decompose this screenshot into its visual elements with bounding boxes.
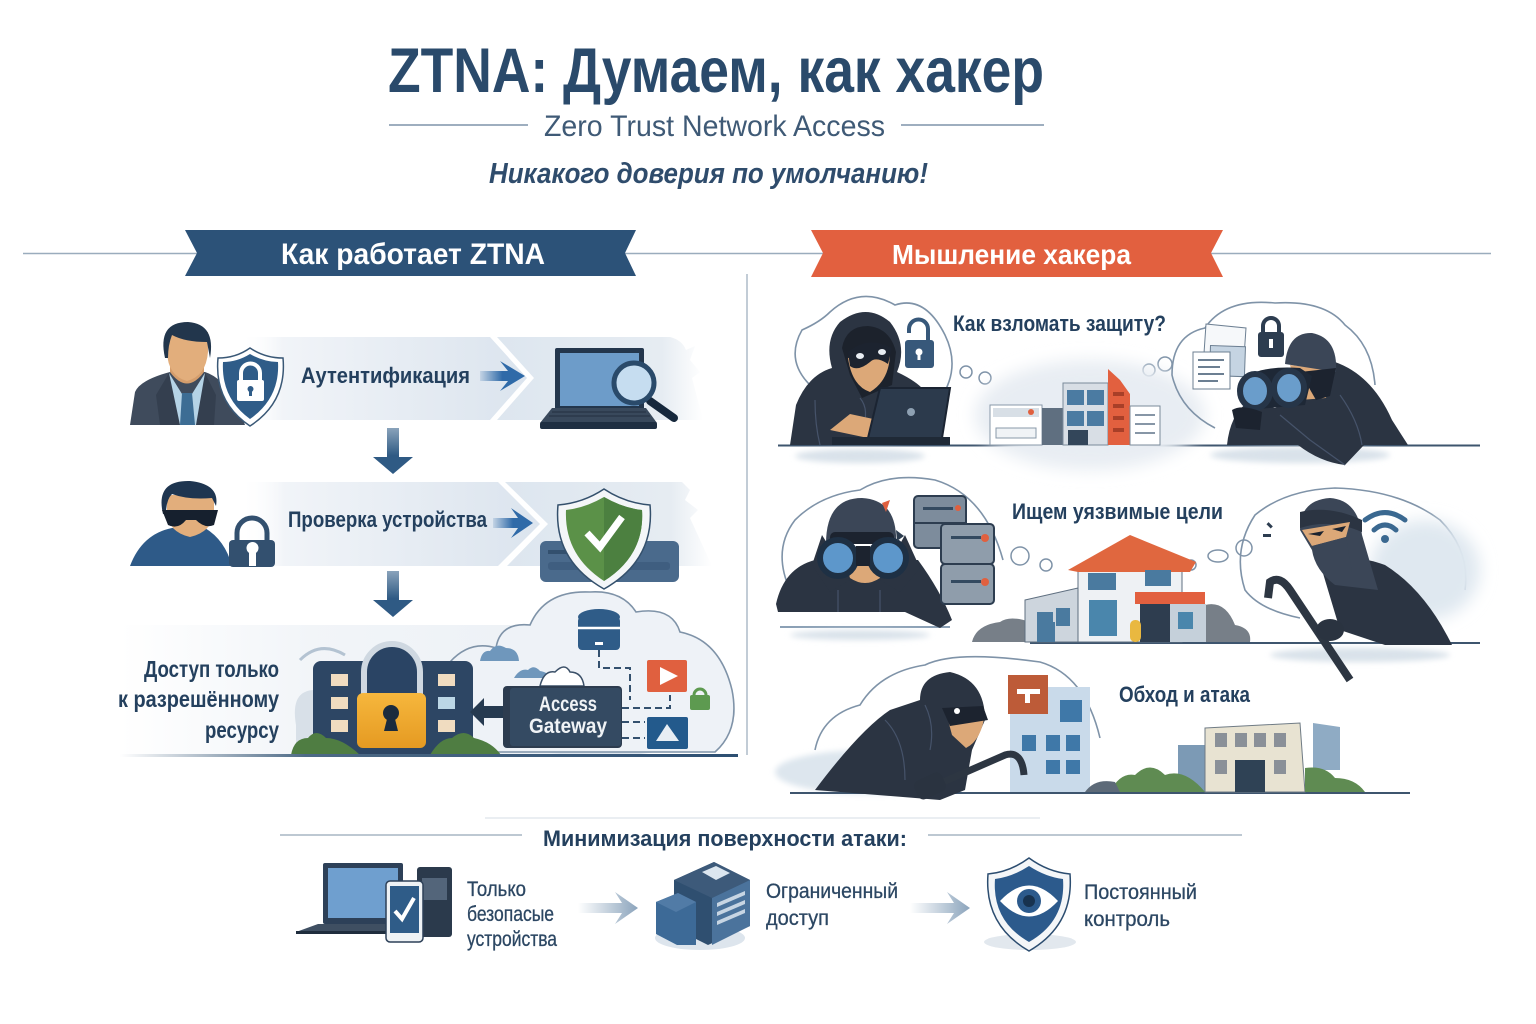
hacker crouching bbox=[815, 672, 1024, 801]
icon: user bbox=[130, 322, 245, 425]
label: Проверка устройства bbox=[288, 507, 488, 532]
icon: locked server bbox=[291, 644, 501, 755]
building with red roof bbox=[972, 535, 1250, 642]
arrow down bbox=[373, 571, 413, 617]
icon: access gateway: Gateway bbox=[529, 715, 607, 738]
banner: how ZTNA works bbox=[185, 230, 636, 276]
icon: user with glasses bbox=[130, 481, 232, 566]
text: Постоянный bbox=[1084, 881, 1197, 904]
icon: padlock bbox=[905, 320, 934, 368]
ground bbox=[775, 750, 1410, 794]
icon: server with shield bbox=[540, 489, 679, 589]
icon: access gateway: Access bbox=[539, 693, 597, 716]
panel: attack surface minimisation bbox=[280, 818, 1242, 951]
buildings bbox=[975, 360, 1205, 470]
cloud with resources bbox=[450, 592, 734, 752]
thought bubbles bbox=[1011, 540, 1252, 571]
arrow bbox=[480, 361, 525, 391]
arrow bbox=[470, 698, 503, 726]
icon: blue tile bbox=[647, 717, 688, 749]
text: Только bbox=[467, 878, 526, 901]
text: устройства bbox=[467, 928, 557, 951]
heading: Минимизация поверхности атаки: bbox=[543, 826, 907, 851]
icon: red tile bbox=[1008, 675, 1048, 714]
step 2: device check bbox=[130, 481, 712, 589]
label bbox=[118, 656, 279, 743]
ground bbox=[780, 626, 1480, 662]
icon: access gateway bbox=[503, 667, 622, 748]
subtitle: Zero Trust Network Access bbox=[544, 110, 885, 143]
hacker with crowbar bbox=[1240, 488, 1480, 680]
blue building bbox=[815, 657, 1100, 792]
thought bubbles bbox=[960, 357, 1172, 384]
label: Аутентификация bbox=[301, 363, 470, 388]
text: контроль bbox=[1084, 908, 1170, 931]
scene 3: bypass and attack bbox=[775, 657, 1410, 801]
label: Ищем уязвимые цели bbox=[1012, 499, 1223, 524]
arrow bbox=[578, 892, 638, 924]
icon: shield with lock bbox=[218, 348, 283, 426]
icon: servers bbox=[882, 496, 994, 604]
ground bbox=[778, 444, 1480, 463]
panel: how ZTNA works bbox=[118, 322, 738, 757]
arrow bbox=[910, 892, 970, 924]
text: Ограниченный bbox=[766, 880, 898, 903]
text: доступ bbox=[766, 907, 829, 930]
arrow bbox=[493, 508, 533, 538]
icon: video tile bbox=[647, 660, 687, 692]
icons: small clouds bbox=[480, 646, 550, 678]
label: к разрешённому bbox=[118, 686, 279, 712]
text bbox=[766, 880, 898, 930]
icon: green lock bbox=[690, 689, 710, 710]
tagline: Никакого доверия по умолчанию! bbox=[489, 158, 928, 190]
icon: documents bbox=[1193, 324, 1246, 389]
title: ZTNA: Думаем, как хакер bbox=[388, 36, 1044, 106]
icon: devices bbox=[296, 863, 452, 942]
hacker with binoculars bbox=[776, 478, 1003, 628]
hacker with laptop bbox=[790, 296, 952, 445]
text bbox=[467, 878, 557, 951]
icon: database bbox=[578, 609, 620, 650]
icon: shield with eye bbox=[984, 858, 1076, 951]
connectors bbox=[599, 650, 670, 738]
label: Как взломать защиту? bbox=[953, 311, 1166, 336]
step 1: authentication bbox=[130, 322, 703, 429]
label: ресурсу bbox=[205, 717, 279, 743]
beige building and bushes bbox=[1085, 723, 1365, 792]
scene 2: look for vulnerable targets bbox=[776, 478, 1480, 680]
banner: hacker mindset: Мышление хакера bbox=[892, 239, 1131, 270]
hacker with binoculars bbox=[1172, 302, 1408, 465]
scene 1: how to break defences bbox=[778, 296, 1480, 470]
icon: laptop with magnifier bbox=[540, 348, 674, 429]
text bbox=[1084, 881, 1197, 931]
label: Доступ только bbox=[144, 656, 279, 682]
text: безопасые bbox=[467, 903, 554, 926]
label: Обход и атака bbox=[1119, 682, 1251, 707]
icon: server bbox=[655, 862, 750, 950]
arrow down bbox=[373, 428, 413, 474]
icon: padlock bbox=[229, 518, 275, 567]
banner: hacker mindset bbox=[811, 230, 1223, 277]
panel: hacker mindset bbox=[775, 296, 1480, 801]
step 3: access to allowed resource bbox=[118, 592, 738, 757]
banner: how ZTNA works: Как работает ZTNA bbox=[281, 238, 545, 271]
